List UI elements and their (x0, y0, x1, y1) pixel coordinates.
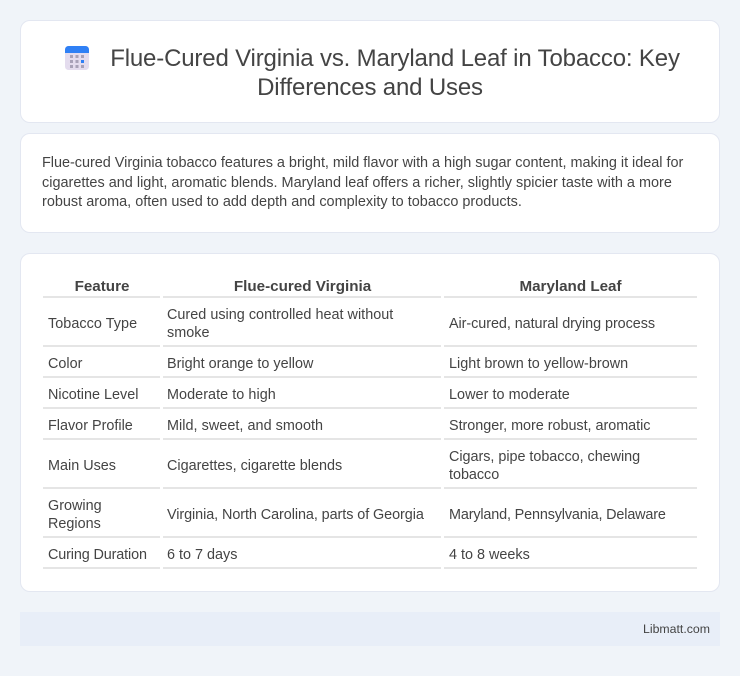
row: main uses: Cigars, pipe tobacco, chewing (449, 449, 640, 465)
row: nicotine level (48, 387, 570, 403)
row: main uses: Cigarettes, cigarette blends (167, 458, 342, 474)
row: flavor profile (48, 418, 650, 434)
table header: Feature (75, 278, 129, 295)
title: Flue-Cured Virginia vs. Maryland Leaf in Tobacco: Key (110, 45, 680, 72)
intro text: cigarettes and light, aromatic blends. Maryland leaf offers a richer, slightly spicier taste with a more (42, 175, 672, 191)
row: tobacco type: Tobacco Type (48, 316, 137, 332)
row: main uses: Main Uses (48, 458, 116, 474)
footer bar (20, 612, 720, 646)
intro text: robust aroma, often used to add depth and complexity to tobacco products. (42, 194, 522, 210)
title (110, 45, 680, 101)
row: curing duration: 4 to 8 weeks (449, 547, 530, 563)
intro text: Flue-cured Virginia tobacco features a bright, mild flavor with a high sugar content, making it ideal for (42, 155, 683, 171)
row: nicotine level: Lower to moderate (449, 387, 570, 403)
row: flavor profile: Flavor Profile (48, 418, 133, 434)
intro text (42, 155, 684, 210)
row: color: Light brown to yellow-brown (449, 356, 628, 372)
table header: Maryland Leaf (519, 278, 622, 295)
row: tobacco type: smoke (167, 325, 210, 341)
row: flavor profile: Mild, sweet, and smooth (167, 418, 323, 434)
panel: comparison table card (20, 253, 720, 592)
row: curing duration (48, 547, 530, 563)
row: main uses: tobacco (449, 467, 499, 483)
table header: Flue-cured Virginia (234, 278, 371, 295)
row: color: Bright orange to yellow (167, 356, 313, 372)
row: tobacco type: Cured using controlled heat without (167, 307, 393, 323)
row: growing regions: Regions (48, 516, 101, 532)
icon: calendar (65, 46, 89, 70)
row: growing regions: Growing (48, 498, 102, 514)
title: Differences and Uses (257, 74, 483, 101)
row: growing regions (48, 498, 666, 532)
row: flavor profile: Stronger, more robust, aromatic (449, 418, 650, 434)
row: nicotine level: Nicotine Level (48, 387, 138, 403)
row: growing regions: Maryland, Pennsylvania, Delaware (449, 507, 666, 523)
panel: intro text card (20, 133, 720, 233)
panel: title card (20, 20, 720, 123)
table header (75, 278, 622, 295)
row: growing regions: Virginia, North Carolina, parts of Georgia (167, 507, 424, 523)
row: color (48, 356, 628, 372)
row: main uses (48, 449, 640, 483)
row: nicotine level: Moderate to high (167, 387, 276, 403)
row: tobacco type: Air-cured, natural drying process (449, 316, 655, 332)
row: color: Color (48, 356, 82, 372)
row: tobacco type (48, 307, 655, 341)
row: curing duration: Curing Duration (48, 547, 147, 563)
footer text: Libmatt.com (643, 622, 710, 636)
row: curing duration: 6 to 7 days (167, 547, 237, 563)
